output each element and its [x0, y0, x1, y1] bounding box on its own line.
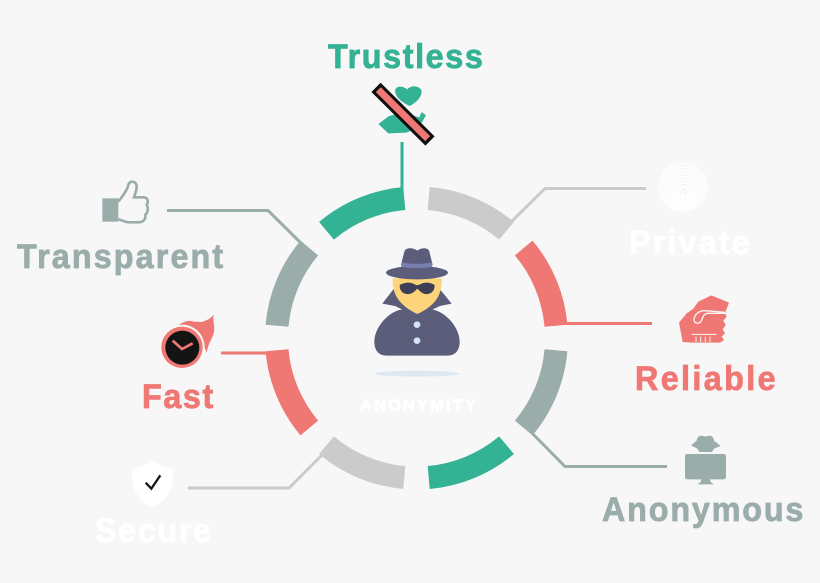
coat body — [374, 309, 460, 356]
leader lines — [167, 142, 667, 488]
face — [393, 278, 442, 314]
icon: thumbs up — [102, 182, 148, 222]
central spy icon — [374, 248, 460, 377]
hat crown — [401, 248, 433, 265]
Private heading: Private — [629, 224, 750, 262]
Reliable heading: Reliable — [635, 360, 776, 398]
icon: fingerprint — [660, 164, 707, 211]
Secure heading: Secure — [95, 512, 211, 550]
icon: flaming clock — [159, 314, 214, 370]
ring segments — [277, 198, 556, 478]
icon: fist handshake — [679, 295, 729, 343]
Anonymous heading: Anonymous — [602, 491, 803, 529]
hat band — [401, 262, 432, 268]
icon: crossed out handshake heart — [376, 86, 430, 141]
icon: hacker at screen — [685, 436, 726, 484]
Fast heading: Fast — [142, 378, 213, 416]
hat brim — [386, 266, 448, 279]
icon: shield with check — [132, 461, 173, 508]
sunglasses — [400, 283, 435, 294]
shadow — [374, 371, 460, 377]
Transparent heading: Transparent — [17, 238, 223, 276]
center label: ANONYMITY — [360, 396, 476, 415]
Trustless heading: Trustless — [328, 38, 483, 76]
buttons — [414, 321, 420, 344]
coat collar — [382, 289, 452, 317]
